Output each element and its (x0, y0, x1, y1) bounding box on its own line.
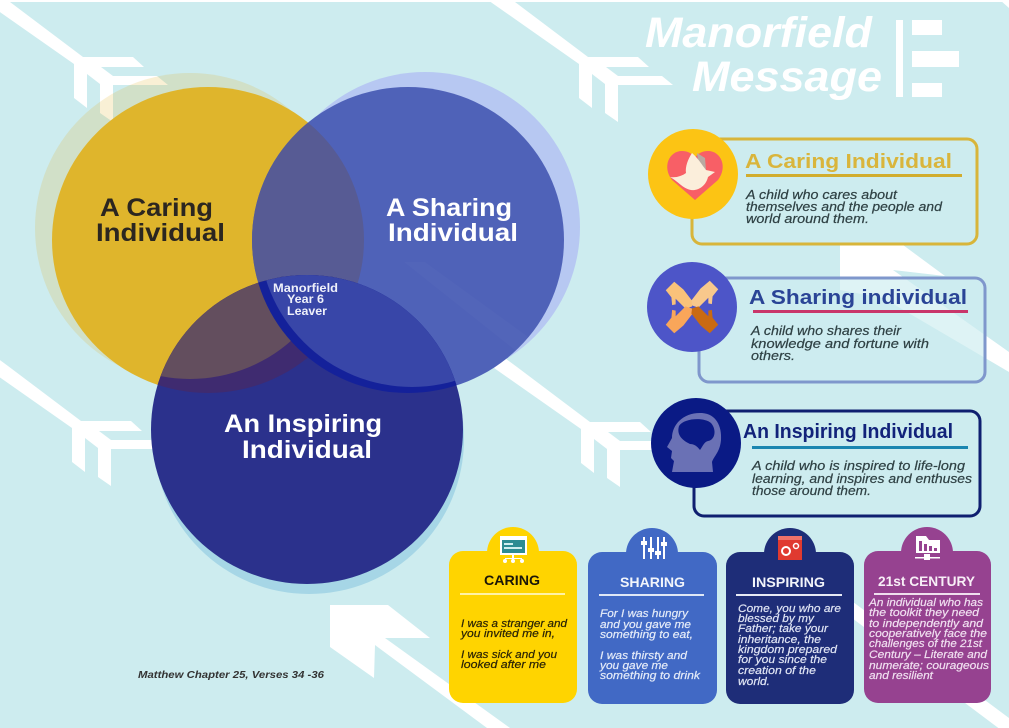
panel: a sharing individual (647, 262, 985, 382)
logo (896, 20, 959, 97)
text block: others. (751, 349, 795, 363)
description: Century – Literate and (869, 649, 988, 661)
verse (460, 618, 568, 671)
verse: I was thirsty and (600, 650, 688, 662)
verse: you gave me (599, 660, 668, 672)
verse: something to eat, (600, 629, 693, 641)
icon: head with brain (651, 398, 741, 488)
description: cooperatively face the (869, 628, 987, 640)
description: the toolkit they need (869, 607, 980, 619)
citation: Matthew Chapter 25, Verses 34 -36 (138, 669, 324, 681)
icon: folder chart (915, 536, 940, 560)
title (645, 9, 882, 101)
verse: I was sick and you (461, 649, 557, 661)
text block (750, 324, 929, 363)
description: and resilient (869, 670, 934, 682)
label: an inspiring individual (224, 410, 382, 464)
icon: web window (500, 536, 527, 563)
venn diagram (0, 72, 600, 594)
heading: A Sharing individual (749, 287, 967, 309)
label: a sharing individual: A Sharing (386, 194, 512, 222)
circle: inspiring (151, 275, 463, 584)
label: a sharing individual: Individual (388, 219, 518, 247)
verse (738, 603, 841, 688)
circle: caring (52, 87, 364, 393)
text block: learning, and inspires and enthuses (752, 472, 972, 486)
text block: those around them. (752, 484, 871, 498)
verse: Come, you who are (738, 603, 841, 615)
text block (751, 459, 972, 498)
verse: creation of the (738, 665, 816, 677)
card: caring (449, 527, 577, 703)
verse: inheritance, the (738, 634, 821, 646)
description: challenges of the 21st (869, 638, 983, 650)
panel: a caring individual (648, 129, 977, 244)
text block: world around them. (746, 212, 869, 226)
heading: 21st CENTURY (878, 573, 976, 589)
label: manorfield year 6 leaver (273, 283, 338, 318)
verse: Father; take your (738, 623, 829, 635)
label: a caring individual: Individual (96, 219, 225, 247)
verse: looked after me (461, 659, 546, 671)
text block: A child who is inspired to life-long (751, 459, 965, 473)
verse (599, 608, 701, 682)
card: 21st century (864, 527, 991, 703)
circle: sharing (252, 87, 564, 393)
description: An individual who has (868, 597, 984, 609)
text block (745, 188, 943, 226)
verse: I was a stranger and (461, 618, 568, 630)
description: to independently and (869, 618, 984, 630)
text block: knowledge and fortune with (751, 337, 929, 351)
heading: A Caring Individual (745, 151, 952, 173)
verse: kingdom prepared (738, 644, 838, 656)
label: a caring individual (96, 194, 225, 247)
heading: An Inspiring Individual (743, 421, 953, 443)
verse: something to drink (600, 670, 701, 682)
verse: world. (738, 676, 770, 688)
verse: For I was hungry (600, 608, 690, 620)
icon: heart and dove (648, 129, 738, 219)
verse: you invited me in, (460, 628, 555, 640)
icon: gears window (778, 536, 802, 560)
verse: for you since the (738, 654, 827, 666)
verse: blessed by my (738, 613, 816, 625)
icon: sliders (641, 537, 667, 559)
label: an inspiring individual: Individual (242, 436, 372, 464)
label: manorfield year 6 leaver: Year 6 (287, 294, 324, 306)
label: an inspiring individual: An Inspiring (224, 410, 382, 438)
text block: themselves and the people and (746, 200, 943, 214)
title: Manorfield (645, 9, 873, 57)
label: manorfield year 6 leaver: Manorfield (273, 283, 338, 295)
heading: SHARING (620, 574, 685, 590)
verse: and you gave me (600, 619, 691, 631)
title: Message (692, 53, 882, 101)
card: sharing (588, 528, 717, 704)
icon: four hands (647, 262, 737, 352)
description (868, 597, 990, 682)
label: a caring individual: A Caring (100, 194, 213, 222)
text block: A child who shares their (750, 324, 902, 338)
label: manorfield year 6 leaver: Leaver (287, 306, 328, 318)
heading: INSPIRING (752, 574, 825, 590)
card: inspiring (726, 528, 854, 704)
label: a sharing individual (386, 194, 518, 247)
description: numerate; courageous (869, 660, 990, 672)
panel: an inspiring individual (651, 398, 980, 516)
text block: A child who cares about (745, 188, 898, 202)
heading: CARING (484, 572, 540, 588)
